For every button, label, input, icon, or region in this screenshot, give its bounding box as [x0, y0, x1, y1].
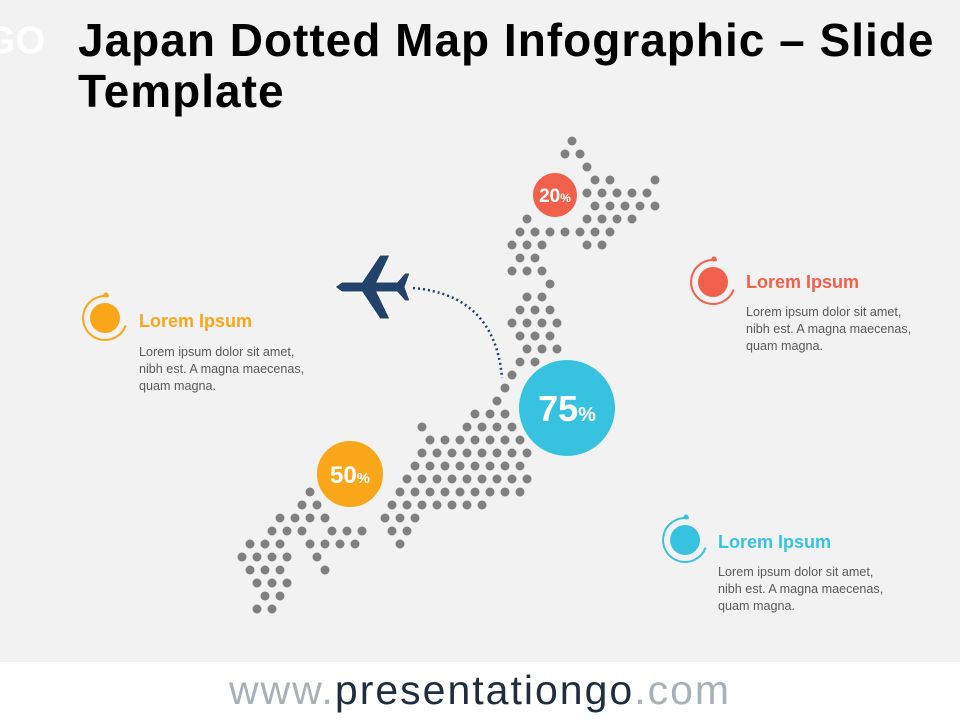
badge: 50%: [315, 439, 385, 509]
icon: orange target: [83, 292, 126, 340]
badge: 20%: [531, 171, 579, 219]
icon: blue target: [663, 514, 706, 562]
heading: left item: Lorem Ipsum: [139, 311, 252, 331]
title: Japan Dotted Map Infographic – Slide: [78, 14, 934, 66]
heading: right bottom item: Lorem Ipsum: [718, 532, 831, 552]
icon: airplane: [335, 255, 410, 319]
title: Template: [78, 65, 285, 117]
badge: 50%: 50%: [330, 462, 370, 489]
text: right top item: Lorem ipsum dolor sit amet,: [746, 305, 901, 319]
text: left item: quam magna.: [139, 379, 216, 393]
dotted map of japan: [238, 136, 660, 614]
text: right top item: nibh est. A magna maecenas,: [746, 322, 911, 336]
badge: 20%: 20%: [539, 186, 571, 207]
text: left item: Lorem ipsum dolor sit amet,: [139, 345, 294, 359]
title: [78, 14, 934, 117]
text: right bottom item: [718, 565, 883, 613]
text: right bottom item: Lorem ipsum dolor sit amet,: [718, 565, 873, 579]
footer: www.presentationgo.com: [229, 667, 731, 713]
text: left item: nibh est. A magna maecenas,: [139, 362, 304, 376]
text: left item: [139, 345, 304, 393]
badge: 75%: [517, 358, 617, 458]
badge: 75%: 75%: [538, 388, 596, 429]
footer: [0, 662, 960, 720]
text: right top item: [746, 305, 911, 353]
heading: right top item: Lorem Ipsum: [746, 272, 859, 292]
text: right bottom item: quam magna.: [718, 599, 795, 613]
text: right top item: quam magna.: [746, 339, 823, 353]
dotted flight path: [413, 288, 502, 378]
icon: red target: [691, 256, 734, 304]
text: right bottom item: nibh est. A magna maecenas,: [718, 582, 883, 596]
